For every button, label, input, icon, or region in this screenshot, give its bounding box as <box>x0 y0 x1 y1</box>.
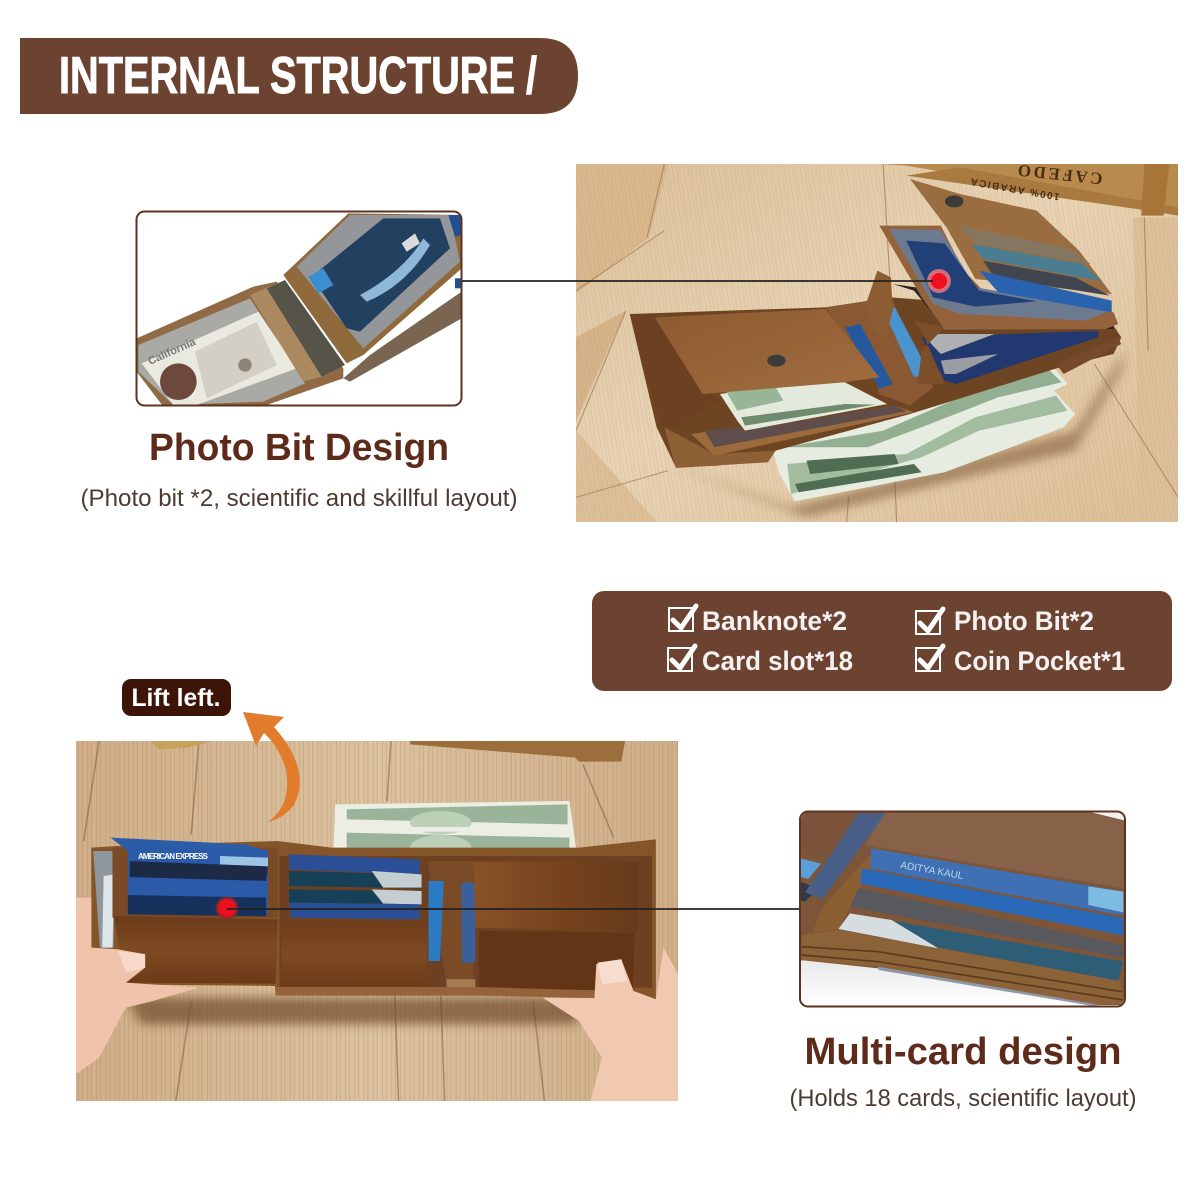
middle card stack <box>289 854 422 919</box>
connector line to photo bit inset <box>460 280 933 282</box>
cards inside middle <box>845 307 1098 389</box>
upper flap <box>910 179 1112 312</box>
icon: check Coin Pocket <box>916 646 943 671</box>
middle pocket <box>281 921 427 987</box>
label: Banknote*2: Banknote*2 <box>702 606 847 636</box>
arrow: lift left <box>243 712 300 822</box>
card lettering: ADITYA KAUL <box>899 860 965 882</box>
badge: Lift left: Lift left. <box>132 684 220 712</box>
inner tan lining <box>826 297 933 406</box>
brass object <box>151 741 212 749</box>
caption: multi-card: (Holds 18 cards, scientific layout) <box>790 1085 1136 1112</box>
coin pocket flap <box>655 309 879 394</box>
photo: wallet open with banknotes on wood table <box>576 161 1178 522</box>
banknotes <box>334 801 576 848</box>
crate lettering <box>972 165 1102 200</box>
crate lettering: CAFEDO <box>1017 161 1103 188</box>
icon: check Photo Bit <box>916 609 943 634</box>
left card stack <box>111 838 268 916</box>
shadow under wallet <box>126 998 587 1024</box>
right hand <box>543 948 678 1101</box>
wooden crate <box>883 164 1178 216</box>
photo window flap <box>879 226 1118 330</box>
banknote roll in coin pocket <box>720 382 887 431</box>
shadow under wallet <box>668 351 1125 517</box>
California licence lettering: California <box>146 336 198 368</box>
wallet body <box>91 839 656 999</box>
icon: check Card slot <box>668 646 695 671</box>
left hand <box>76 898 199 1074</box>
inset: multi-card design <box>800 812 1127 1007</box>
connector line to multi-card inset <box>227 908 802 910</box>
label: Card slot*18: Card slot*18 <box>702 646 853 676</box>
caption: photo bit: (Photo bit *2, scientific and skillful layout) <box>80 485 518 512</box>
crate on table <box>410 741 625 762</box>
label: Coin Pocket*1: Coin Pocket*1 <box>954 646 1125 676</box>
crate lettering: 100% ARABICA <box>970 175 1061 202</box>
heading: Photo Bit Design: Photo Bit Design <box>149 427 449 469</box>
dark interior beneath flap <box>893 284 1114 329</box>
photo: open wallet held in hands <box>76 741 678 1101</box>
left pocket <box>114 916 278 984</box>
heading: Multi-card design: Multi-card design <box>804 1031 1122 1073</box>
icon: check Banknote <box>669 606 696 631</box>
strap <box>867 270 893 324</box>
label: Photo Bit*2: Photo Bit*2 <box>954 606 1094 636</box>
red marker <box>929 271 949 291</box>
red marker <box>217 898 237 918</box>
centre gap with blue cards <box>427 861 475 989</box>
heading banner: Internal Structure: INTERNAL STRUCTURE / <box>59 47 537 105</box>
heading banner: Internal Structure <box>20 38 578 114</box>
pocket tab with grey lining <box>691 406 914 456</box>
card lettering: AMERICAN EXPRESS <box>138 852 209 861</box>
wallet body <box>630 297 1121 468</box>
banknotes <box>772 361 1075 501</box>
left inner leather panel <box>630 314 632 320</box>
inset: photo bit design <box>136 212 462 407</box>
coin pocket <box>276 862 656 999</box>
badge: Lift left <box>122 679 231 716</box>
feature panel <box>592 591 1172 691</box>
